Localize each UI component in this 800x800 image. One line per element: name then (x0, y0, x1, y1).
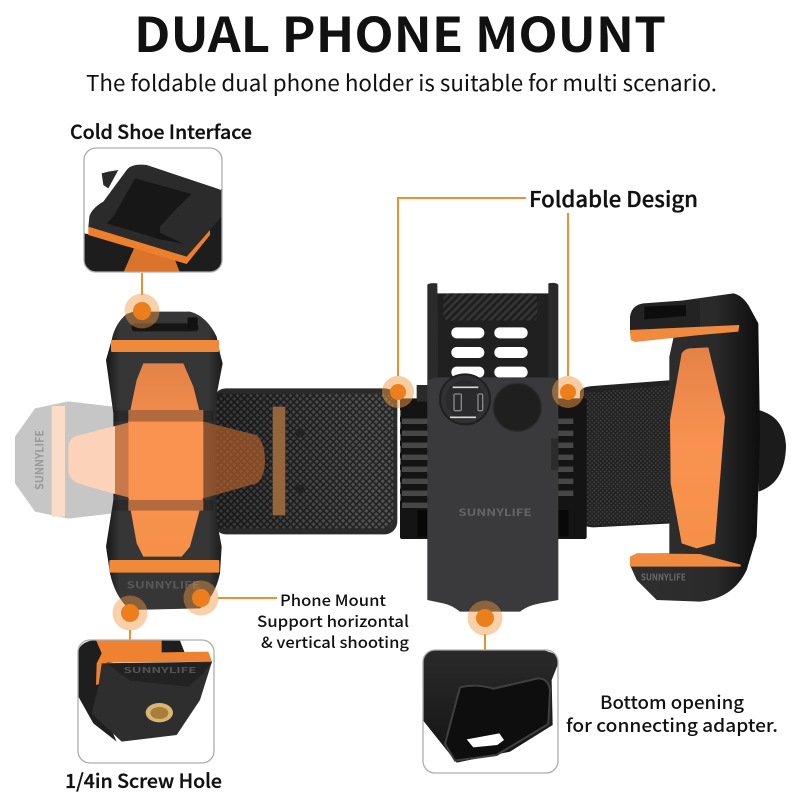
foldable back plate (213, 388, 397, 534)
subtitle: The foldable dual phone holder is suitable for multi scenario. (86, 66, 717, 98)
photo: left phone mount with plate (15, 312, 397, 610)
marker: foldable right (552, 376, 584, 408)
label: bottom opening: Bottom opening (600, 689, 745, 715)
label: phone mount: & vertical shooting (261, 631, 409, 653)
marker: phone mount (184, 580, 218, 616)
clamp body: SUNNYLIFE (127, 576, 200, 591)
panel: screw hole detail photo (77, 640, 214, 763)
label: phone mount (257, 589, 409, 653)
panel: bottom opening detail photo (423, 650, 558, 773)
back panel with slots (427, 283, 558, 383)
label: bottom opening: for connecting adapter. (566, 712, 778, 738)
panel: screw hole detail photo: SUNNYLIFE (124, 665, 196, 676)
callout line: phone mount (218, 597, 277, 599)
right phone clamp: SUNNYLIFE (641, 570, 686, 584)
label: bottom opening (566, 689, 778, 738)
clamp body (106, 312, 223, 610)
label: screw hole: 1/4in Screw Hole (65, 765, 222, 794)
rotated translucent pad (68, 422, 265, 498)
marker: bottom opening (468, 600, 502, 636)
marker: foldable left (382, 376, 414, 408)
callout line: foldable design left (398, 198, 526, 376)
hinges (399, 385, 587, 539)
heading: cold shoe interface: Cold Shoe Interface (70, 116, 252, 145)
label: phone mount: Phone Mount (280, 589, 386, 611)
ghost rotated clamp: SUNNYLIFE (31, 430, 47, 490)
panel: cold shoe detail photo (84, 148, 223, 273)
ghost rotated clamp (15, 401, 113, 519)
photo: center foldable holder (399, 283, 786, 612)
callout line: bottom opening (484, 634, 486, 650)
callout line: screw hole (129, 630, 131, 640)
label: foldable design: Foldable Design (529, 183, 698, 214)
callout line: cold shoe (141, 273, 143, 295)
marker: cold shoe (124, 294, 160, 328)
front cover (427, 374, 558, 612)
right plate (577, 380, 673, 527)
label: phone mount: Support horizontal (257, 610, 409, 632)
right phone clamp (630, 293, 786, 602)
marker: screw hole (112, 596, 148, 630)
callout line: foldable design right (567, 213, 569, 376)
front cover: SUNNYLIFE (458, 504, 532, 519)
